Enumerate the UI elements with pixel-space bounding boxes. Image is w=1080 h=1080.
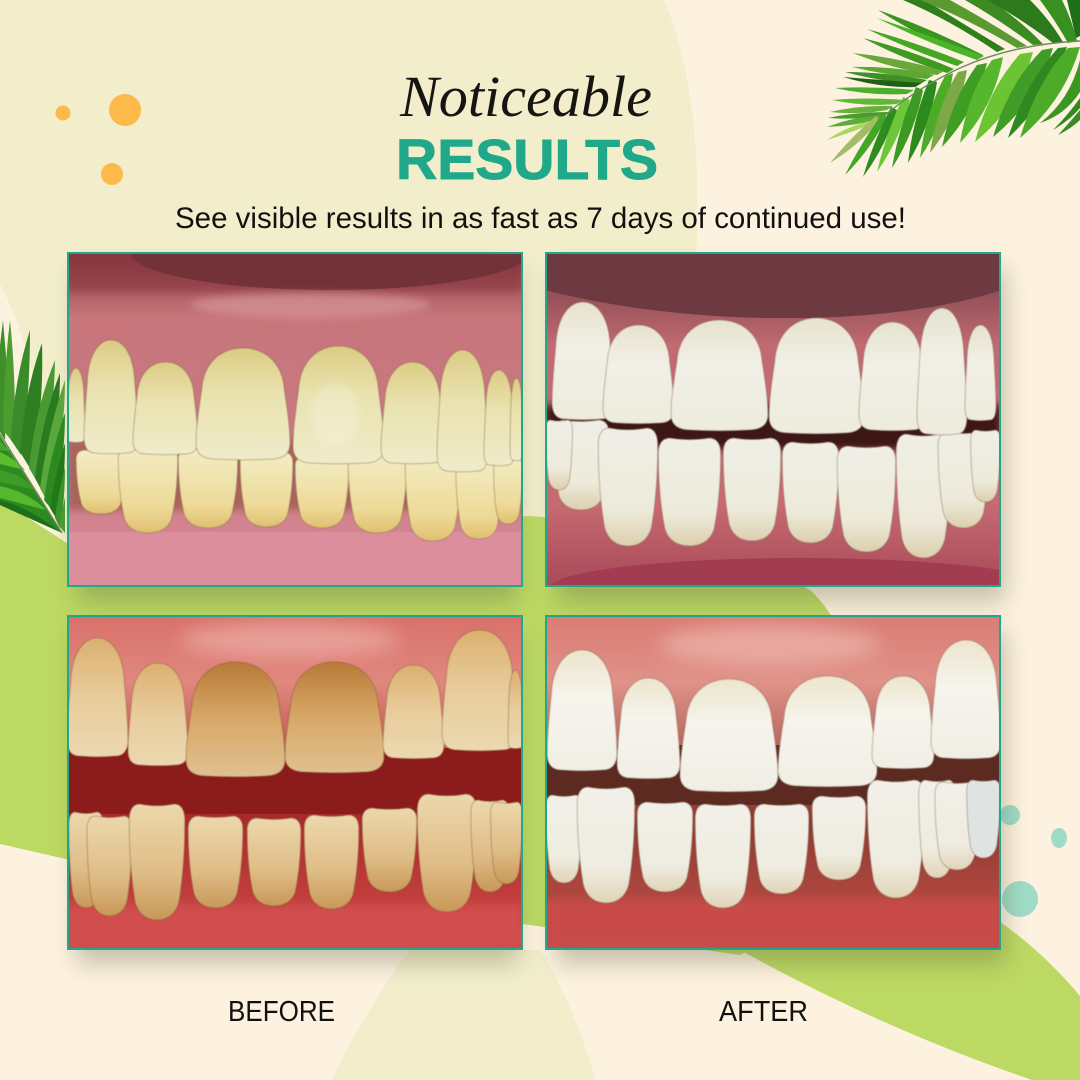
label: before: BEFORE — [228, 996, 335, 1028]
photo: before, top — [67, 252, 523, 587]
subtitle: See visible results in as fast as 7 days of continued use! — [175, 202, 906, 235]
decorative teal dots — [1000, 805, 1067, 917]
palm leaf: left — [0, 320, 65, 533]
label: after: AFTER — [719, 996, 808, 1028]
photo: before, bottom — [67, 615, 523, 950]
leaf rachis — [883, 41, 1080, 117]
photo: after, top — [545, 252, 1001, 587]
palm leaf: top right — [827, 0, 1080, 177]
photo: after, bottom — [545, 615, 1001, 950]
title: RESULTS: RESULTS — [396, 128, 658, 192]
panel shadows — [76, 268, 1006, 964]
decorative orange dots — [56, 94, 141, 185]
title: Noticeable: Noticeable — [399, 64, 652, 129]
